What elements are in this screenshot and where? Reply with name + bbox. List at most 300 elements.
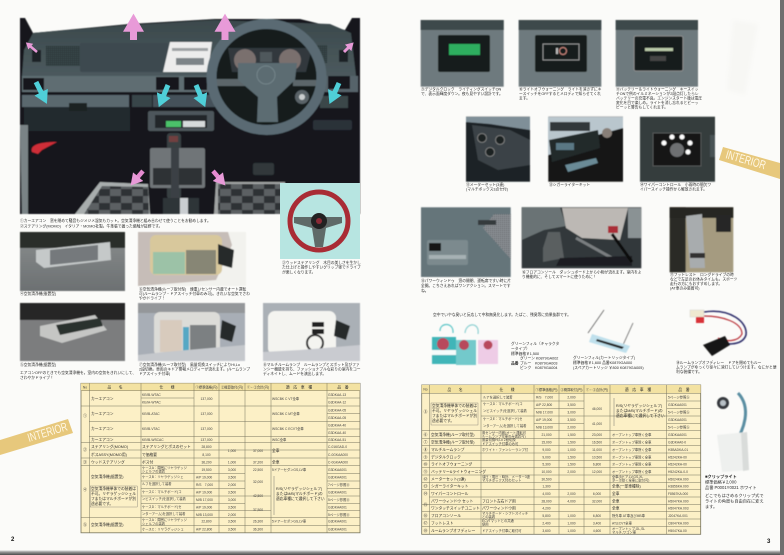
right table rows: マルチボード・シフトスイッチ xyxy=(482,510,528,516)
table rows: G3DKAA-40 xyxy=(328,431,346,435)
table rows: G3DKAA-05 xyxy=(328,408,346,412)
table rows: 全車 xyxy=(272,448,280,453)
right table rows: デジタルクロック xyxy=(431,454,461,459)
right table rows: ⑧ xyxy=(424,447,428,452)
right table rows: フまたはマルチボードが別 xyxy=(432,413,477,418)
right table rows: AT,ECVT全車 xyxy=(612,520,633,525)
right table rows: H3BADKA-01 xyxy=(668,448,688,452)
right table rows: 6,000 xyxy=(593,492,601,496)
right table rows: 1,500 xyxy=(567,455,576,459)
panel: light off warning photo xyxy=(519,20,601,87)
table rows: ルフを選択して装着 xyxy=(142,481,172,486)
table rows: 適応車種にて選択して下さい xyxy=(276,496,325,501)
table: right page price list xyxy=(422,385,701,534)
right table header: 適 応 車 種 xyxy=(625,387,651,392)
table rows: C-016GAD-0 xyxy=(328,445,347,449)
table rows: 7ページ参照⑧ xyxy=(328,482,350,487)
table rows: ボスASSY(MOMO用) xyxy=(91,452,128,457)
table rows: 空気清浄機(据置型) xyxy=(91,474,124,479)
right table rows: 全車 xyxy=(612,491,620,496)
icon: cyan arrow vent 3 xyxy=(196,85,201,97)
right table rows: シガーライターキット xyxy=(431,484,469,488)
right table header: ①標準価格(円) xyxy=(536,387,557,392)
panel: air purifier photo 5 xyxy=(20,303,125,361)
right table rows: マルチボックス付のセット xyxy=(482,477,521,482)
table rows: 1,000 xyxy=(228,460,236,464)
right table rows: ⑦ xyxy=(424,440,428,444)
icon: pink floor arrow right xyxy=(213,171,219,178)
right table rows: メーターセット(3連) xyxy=(431,476,466,481)
right table rows: 1,500 xyxy=(567,433,576,437)
caption: roof air purifier 7: ⑦空気清浄機(ルーフ取付型) 風量切換スイッチによりHi,Lo xyxy=(139,362,240,367)
right table rows: オープントップ車除く全車 xyxy=(612,454,652,459)
caption: multi room lamp 8: ンシー機能を持ち、ファッショナブルな彩りの室内をコー xyxy=(263,366,361,372)
icon: cyan arrow vent 1 xyxy=(36,82,42,94)
table rows: 137,000 xyxy=(201,427,213,431)
table rows: 2,000 xyxy=(228,483,236,487)
table rows: 36,300 xyxy=(253,528,263,532)
table header: 品 番 xyxy=(337,384,349,390)
table rows: 32,000 xyxy=(253,480,263,484)
right table rows: 4,000 xyxy=(542,492,551,496)
table rows: 28,800 xyxy=(201,445,212,449)
text: clip light description: 品番 P0001Y0021 ホワイト xyxy=(705,484,757,491)
panel: roof air purifier photo 7 xyxy=(138,303,245,361)
right table rows: 3,400 xyxy=(593,521,601,525)
right table header: 品 番 xyxy=(678,387,690,392)
table rows: シェルフの装着 xyxy=(142,468,166,474)
table rows: ① xyxy=(83,413,87,418)
table rows: 3,500 xyxy=(228,476,236,480)
text: green fill character type: 標準価格￥1,500 xyxy=(511,351,539,356)
table rows: 26,300 xyxy=(253,520,263,524)
text: green fill character type xyxy=(511,341,559,370)
caption: light off warning: ます。 xyxy=(519,96,530,100)
caption: wiper control xyxy=(640,182,711,192)
text: clip light description: 標準価格￥2,000 xyxy=(705,478,737,486)
captions: air conditioner and MOMO steering xyxy=(20,218,211,228)
right table rows: 3,500 xyxy=(567,418,576,422)
caption: battery meter: ピーッと警告もしてくれます。 xyxy=(616,104,668,110)
caption: foot rest: (AT車のみ装着可) xyxy=(670,286,700,290)
right table rows: 1,000 xyxy=(567,514,576,518)
table rows: KE/iA-WTAC xyxy=(142,400,161,404)
right table rows: 風センサー内蔵(オート運転可 xyxy=(482,430,527,435)
right table rows: 風量切換Hi,Lo 2段切換 xyxy=(482,437,516,442)
caption: room lamp off delay xyxy=(676,360,777,374)
right table rows: 5,300 xyxy=(542,462,551,466)
right table rows: ルームランプ付車のみ装着可) xyxy=(482,433,526,438)
table rows: ボス付 xyxy=(142,459,154,464)
right table rows: A/P 22,800 xyxy=(536,403,552,407)
table rows: KE/iB-VTAC xyxy=(142,427,161,431)
table rows: で価格要 xyxy=(142,452,157,457)
panel: roof air purifier photo 6 xyxy=(138,232,246,286)
right table rows: 4,000 xyxy=(567,499,576,503)
right table rows: 6,800 xyxy=(593,514,601,518)
icon: pink corner arrow right xyxy=(344,47,349,52)
caption: multi room lamp 8: ディネイトし、ムードを演出します。 xyxy=(263,371,326,376)
table rows: 1,000 xyxy=(228,449,236,453)
caption: battery meter: ⑪バッテリー＆ライトウォーニング キースイッ xyxy=(616,86,699,92)
right table rows: ホワイト・ファンシーランプ付 xyxy=(482,447,529,452)
right table header: 仕 様 xyxy=(499,387,515,392)
right table rows: 1,000 xyxy=(567,448,576,452)
text: green fill character type: 品番 xyxy=(511,360,519,365)
caption: wood steering xyxy=(282,260,361,274)
table rows: G3DKAA001 xyxy=(328,490,347,494)
right table rows: オープントップ車除く全車 xyxy=(612,469,652,474)
caption: roof air purifier 6: 可(ルームランプ・ドアスイッチ付車のみ可)。きれいな空気でさわ xyxy=(139,291,250,296)
right table rows: 2,400 xyxy=(542,521,551,525)
right table rows: ⑯ xyxy=(424,513,428,518)
right table rows: 空気清浄機(ルーフ取付型) xyxy=(431,432,475,437)
right table rows: 9,000 xyxy=(542,455,551,459)
caption: room lamp off delay: ムランプがゆっくり徐々に消灯していつけます。なにかと便 xyxy=(676,364,777,370)
right table rows: 1,000 xyxy=(567,521,576,525)
right table rows: 3,500 xyxy=(567,403,576,407)
right table rows: G3DKAA001 xyxy=(668,433,687,437)
right table rows: 10,500 xyxy=(592,455,602,459)
right table rows: 全車 xyxy=(612,506,620,510)
table rows: 空気清浄機(据置型) xyxy=(91,522,124,527)
table rows: 3,500 xyxy=(228,520,236,524)
right table rows: H5047KA.00 xyxy=(668,529,687,533)
text: clip light description: ■クリップライト xyxy=(705,473,737,480)
right table rows: 1,300 xyxy=(542,484,551,488)
text: clip light description: ライトの角度も自由自在に変え xyxy=(705,498,764,504)
table rows: 37,500 xyxy=(253,508,263,512)
table header: 適 応 車 種 xyxy=(286,384,312,390)
right table rows: ⑱ xyxy=(424,528,428,533)
right table rows: またはM/B(マルチボード)の xyxy=(616,408,663,413)
icon: cyan arrow vent 4 xyxy=(334,83,339,94)
right table rows: ⑩ xyxy=(424,462,428,466)
caption: light off warning xyxy=(519,86,602,100)
caption: power window: 全開。こちさえあればワンアクション。スマートです xyxy=(421,283,511,288)
right table rows: フロアコンソール xyxy=(431,513,461,518)
right table rows: ⑭ xyxy=(424,491,428,496)
text: green fill character type: ータイプ） xyxy=(511,346,530,351)
table rows: 5ページ参照⑧ xyxy=(328,512,350,517)
right table rows: ドアスイッチ付車に取付可 xyxy=(482,528,522,533)
caption: meter set xyxy=(466,182,509,192)
table rows: G3DKAA001 xyxy=(328,468,347,472)
table rows: ケースC：マルチボード(コ xyxy=(142,489,182,494)
right table rows: との装着 xyxy=(482,514,496,519)
table rows: WSC全車 xyxy=(272,437,287,442)
table rows: 3,500 xyxy=(228,506,236,510)
right table rows: 3,000 xyxy=(567,410,576,414)
caption: roof air purifier 7 xyxy=(139,362,250,376)
text: green fill character type: グリーンフィル（キャラクタ xyxy=(511,341,559,346)
table rows: ケースA：周囲にリヤラゲッジ xyxy=(142,517,188,522)
table rows: 3,000 xyxy=(228,468,236,472)
icon: pink up arrow left xyxy=(130,29,137,40)
right table rows: フットレスト xyxy=(431,520,454,525)
text: green fill intro: 空中でいやな臭いと反応して中和無臭化します。たばこ、残臭等に効果抜群です。 xyxy=(433,312,571,317)
table rows: 5ドアーセダンGS,LV車 xyxy=(272,518,307,524)
right table rows: ⑬ xyxy=(424,484,428,488)
right table rows: H5047KA.003 xyxy=(668,506,689,510)
right table rows: H3856KA.000 xyxy=(668,484,689,488)
banner: left INTERIOR xyxy=(0,419,73,455)
table header xyxy=(83,384,349,390)
right table header: 品 名 xyxy=(447,387,463,392)
panel: dashboard photo with airflow arrows xyxy=(20,18,360,214)
table rows: 3,500 xyxy=(228,490,236,494)
table rows: ⑤ xyxy=(83,522,87,527)
table rows: カーエアコン xyxy=(91,437,114,442)
table header: No xyxy=(83,386,87,390)
right table rows: ケースE：マルチボード(セ xyxy=(483,416,522,421)
right table rows: マルチルームランプ xyxy=(431,447,465,452)
table rows: ウッドステアリング xyxy=(91,459,125,464)
table rows: 37,000 xyxy=(253,449,263,453)
captions: air conditioner and MOMO steering: ②ステアリング(MOMO) イタリア・MOMO社製。牛革張で握った感触が抜群です。 xyxy=(20,224,162,228)
right table rows: M/B 17,000 xyxy=(536,410,553,414)
banner: left INTERIOR: INTERIOR xyxy=(26,419,69,445)
right table rows: H5242KA-0-0 xyxy=(668,470,688,474)
icon: pink up arrow right xyxy=(222,29,228,40)
right table rows: G3DKAA001 xyxy=(668,418,687,422)
table rows: A/P 22,800 xyxy=(196,528,212,532)
text: green fill character type: ピンク K0879GA004 xyxy=(520,365,558,370)
panel: power window switch photo xyxy=(421,207,511,277)
table rows: A/P 19,000 xyxy=(196,506,212,510)
text: green fill cartridge type: (スペアカートリッジ ￥800 K0879GA005) xyxy=(573,365,644,370)
right table rows: C8047KA.000 xyxy=(668,521,689,525)
decorative ghost print xyxy=(727,20,758,95)
right table header: ②概算取付(円) xyxy=(561,387,582,392)
caption: roof air purifier 7: ドアスイッチ付車) xyxy=(139,371,171,376)
right table rows: 1,500 xyxy=(567,462,576,466)
table rows: またはM/B(マルチボード)の xyxy=(276,491,323,496)
caption: digital clock: で、表示面輝度ダウン。夜も見やすい設計です。 xyxy=(421,91,503,96)
table rows: 2,000 xyxy=(228,513,236,517)
caption: battery meter: バッテリーの充電不良。エンジンスタート後は電圧 xyxy=(616,96,702,100)
right table rows: M/B 13,000 xyxy=(536,426,553,430)
panel: air purifier photo 4 xyxy=(20,232,125,291)
right table rows: 23,000 xyxy=(592,433,602,437)
right table rows: 9,000 xyxy=(542,448,551,452)
table rows: G3DKAA001 xyxy=(328,528,347,532)
right table header: No xyxy=(423,388,428,392)
right table rows: 全車(一部車種除) xyxy=(612,484,641,488)
table rows: R/S 7,000 xyxy=(196,483,213,487)
table rows: KE/iB-WTAC xyxy=(142,393,161,397)
right table rows: オープントップ,GL,SL xyxy=(612,526,645,531)
caption: wiper control: イパースイッチ操作から解放されます。 xyxy=(640,186,707,192)
table rows: 3,000 xyxy=(228,498,236,502)
right table rows: 2,000 xyxy=(567,470,576,474)
table rows: 42,500 xyxy=(253,494,263,498)
right table rows: 1,500 xyxy=(567,440,576,444)
caption: roof air purifier 6: ⑥空気清浄機(ルーフ取付型) 煙重いセンサー内蔵でオート運転 xyxy=(139,286,247,292)
caption: room lamp off delay: ⑱ルームランプオフディレー ドアを閉めてもルー xyxy=(676,360,762,365)
table rows: ンビスイッチ)を選択して装着 xyxy=(142,496,187,501)
table rows: 途必要です。 xyxy=(91,501,113,506)
right table rows: ⑰ xyxy=(424,520,428,525)
text: clip light description: ます。 xyxy=(705,504,717,510)
right table rows: ドアスイッチ付車のみ可 xyxy=(482,441,519,446)
table rows: ケースB：リヤラゲッジシェ xyxy=(142,474,184,479)
right table rows: バッテリー&ライトウォーニング xyxy=(431,469,486,474)
text: green fill cartridge type xyxy=(573,355,644,370)
panel: digital clock photo xyxy=(421,20,504,87)
right table rows: 11,000 xyxy=(592,448,602,452)
text: green fill cartridge type: グリーンフィル(カートリッジタイプ) xyxy=(573,355,636,360)
right table rows: ライトオフウォーニング xyxy=(431,462,473,466)
right table rows: ターボ除く全車に取付可) xyxy=(612,477,649,482)
table rows: ンターアーム)を選択して装着 xyxy=(142,511,186,516)
caption: cigar lighter kit: ⑬シガーライターキット xyxy=(549,182,590,187)
table rows: 8,100 xyxy=(202,453,211,457)
right table rows: ワイパーコントロール xyxy=(431,491,469,496)
caption: meter set: ⑫メーターセット(3連) xyxy=(466,182,505,187)
right table rows: 空気清浄機単体での装着は xyxy=(432,403,477,408)
right table rows: J2047KA.001 xyxy=(668,514,688,518)
caption: air purifier 5: エアコンOFFのときでも空気清浄機を。室内の空気をきれいにして、 xyxy=(20,370,136,375)
panel: floor console photo xyxy=(522,207,641,268)
table rows: 37,200 xyxy=(253,460,263,464)
caption: digital clock: ⑨デジタルクロック ライティングスイッチON xyxy=(421,86,502,92)
caption: wood steering: が楽しくなります。 xyxy=(282,269,315,274)
table rows: カーエアコン xyxy=(91,396,114,401)
right table rows: 15,000 xyxy=(541,440,552,444)
table rows: KE/iB-ATAC xyxy=(142,412,160,416)
right table rows: G3DKAA001 xyxy=(668,403,687,407)
right table rows: 2,000 xyxy=(567,426,576,430)
right table rows: ルームランプオフディレー xyxy=(431,528,476,533)
caption: room lamp off delay: 利な装備です。 xyxy=(676,369,702,374)
page edge shadow bottom xyxy=(0,550,784,555)
banner: right INTERIOR: INTERIOR xyxy=(724,147,768,172)
text: clip light description xyxy=(705,473,764,510)
table header: 仕 様 xyxy=(159,384,175,390)
right table rows: 2,000 xyxy=(567,492,576,496)
right table rows: 16,500 xyxy=(592,440,602,444)
table rows: ② xyxy=(83,447,87,452)
panel: foot rest photo xyxy=(670,207,733,272)
right table rows: R/S 7,000 xyxy=(536,396,553,400)
caption: wiper control: ⑭ワイパーコントロール 小雨時の間欠ワ xyxy=(640,182,711,187)
icon: cyan arrow vent 2 xyxy=(163,85,168,97)
table header: ②概算取付(円) xyxy=(221,384,243,390)
right table rows: A/P 19,000 xyxy=(536,418,552,422)
right table rows: 油圧・電圧・時計、メーター3連 xyxy=(482,474,531,479)
right table rows: 途必要です。 xyxy=(432,418,454,423)
right table rows: 5,800 xyxy=(542,514,551,518)
table rows: C-0GKAA000 xyxy=(328,453,348,457)
right table rows: ンターアーム)を選択して装着 xyxy=(483,423,527,428)
icon: clip light xyxy=(717,393,749,472)
right table rows: 46,000 xyxy=(592,407,602,411)
table rows: G3DKAA001 xyxy=(328,520,347,524)
right table rows: 適応車種にて選択して下さい xyxy=(616,413,665,418)
icon: green fill cartridge xyxy=(588,310,633,353)
right table rows: 28,000 xyxy=(541,499,552,503)
panel: wiper control photo xyxy=(640,117,715,182)
table rows: ④ xyxy=(83,487,87,492)
right table rows: ⑫ xyxy=(424,476,428,481)
right table rows: ⑨ xyxy=(424,454,428,459)
right table rows: R/S(リヤラゲッジシェルフ) xyxy=(616,403,663,408)
page edge shadow right xyxy=(780,0,784,555)
right table rows: オープントップ車除く全車 xyxy=(612,462,652,466)
caption: roof air purifier 6 xyxy=(139,286,250,300)
right table rows: 4,600 xyxy=(593,529,601,533)
table rows: G3DKAA001 xyxy=(328,506,347,510)
table rows: 137,000 xyxy=(201,412,213,416)
right table rows: 除外車 AT車及びMB車 xyxy=(612,513,646,518)
right table rows: 3,600 xyxy=(542,529,551,533)
table rows: 5ドアーセダンGS,LV車 xyxy=(272,467,307,472)
caption: air purifier 4: ④空気清浄機(後置型) xyxy=(20,291,57,296)
right table rows: H5242KA-00 xyxy=(668,462,687,466)
right table rows: 2,000 xyxy=(567,396,576,400)
table rows: C-0GKAA000 xyxy=(328,460,348,464)
caption: battery meter: チONで例のイルミネーションが2段点灯したらレ xyxy=(616,91,699,96)
right table rows: フロント左右ドア用 xyxy=(482,498,516,503)
panel: meter set photo xyxy=(466,117,530,182)
text: green fill character type: ブルー K0879GA003 xyxy=(520,360,558,365)
table rows: 不可。リヤラゲッジシェル xyxy=(91,491,136,496)
caption: wood steering: ③ウッドステアリング 木目の美しさを生かし xyxy=(282,260,361,265)
table rows: M/B 17,000 xyxy=(196,498,213,502)
caption: light off warning: ースイッチをOFFするとメロディで知らせてくれ xyxy=(519,91,601,96)
table rows: ③ xyxy=(83,459,87,464)
right table rows: H5024KA.000 xyxy=(668,477,689,481)
right table rows: ケースD：マルチボード(コ xyxy=(483,401,523,406)
caption: foot rest: ⑰フットレスト ロングドライブの時 xyxy=(670,272,734,277)
captions: air conditioner and MOMO steering: ①カーエアコン 窓を閉めて騒音もジメジメ湿気もカット。空気清浄機と組み合わせて使うことをお勧めします。 xyxy=(20,218,211,223)
panel: wood steering wheel photo xyxy=(280,183,360,259)
table rows: G3DKAA-13 xyxy=(328,393,346,397)
right table rows: 1,000 xyxy=(567,529,576,533)
panel: battery meter photo xyxy=(616,20,698,87)
table rows: R/S(リヤラゲッジシェルフ) xyxy=(276,486,323,491)
caption: light off warning: ⑩ライトオフウォーニング ライトを消さずにキ xyxy=(519,86,602,92)
right table rows: 30,500 xyxy=(541,477,552,481)
table rows: 全車 xyxy=(272,459,280,464)
right table rows: ワンタッチスイッチユニット xyxy=(431,506,480,510)
table rows xyxy=(83,393,350,532)
table rows: 空気清浄機単体での装着は xyxy=(91,486,136,491)
table rows: G3DKAA-05 xyxy=(328,416,346,420)
right table header: ①・②合計(円) xyxy=(586,387,608,392)
table rows: フまたはマルチボードが別 xyxy=(91,496,136,501)
page number 2: 2 xyxy=(11,537,15,543)
text: clip light description: どこでもはさめるクリップ式で xyxy=(705,492,764,499)
table rows: カーエアコン xyxy=(91,411,114,416)
right table rows: 不可。リヤラゲッジシェル xyxy=(432,408,477,413)
table rows: G3DKAA-51 xyxy=(328,438,346,442)
right table header xyxy=(423,387,690,392)
caption: air purifier 5 xyxy=(20,362,136,380)
right table rows: 5ページ参照⑤ xyxy=(668,424,690,430)
caption: roof air purifier 6: やかドライブ！ xyxy=(139,296,165,300)
table rows: G3DKAA001 xyxy=(328,476,347,480)
table rows: 36,200 xyxy=(201,460,212,464)
right table rows: 空気清浄機(ルーフ取付型) xyxy=(431,440,475,444)
caption: foot rest: 走行の方にもおすすめします。 xyxy=(670,281,722,286)
right table rows: ⑥ xyxy=(424,432,428,437)
table: left page price list xyxy=(81,383,360,533)
right table rows: F8567KA.000 xyxy=(668,492,688,496)
caption: foot rest xyxy=(670,272,738,290)
right table rows: ⑮ xyxy=(424,502,428,507)
